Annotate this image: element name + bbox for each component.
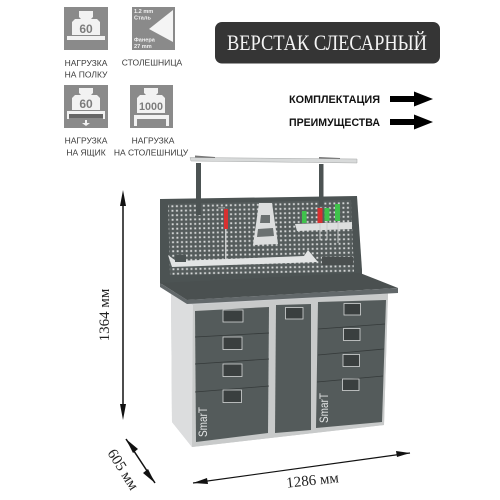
icon: tabletop layers: 1.2 mm	[134, 9, 153, 15]
label: shelf load: НАГРУЗКА	[65, 58, 108, 68]
lamp shelf	[190, 156, 357, 163]
label: shelf load: НА ПОЛКУ	[65, 70, 108, 80]
shelf posts	[196, 163, 324, 215]
label: drawer load: НА ЯЩИК	[66, 148, 106, 158]
label: depth: 605 мм	[104, 446, 141, 494]
label: tabletop load: НАГРУЗКА	[132, 136, 175, 146]
icon: tabletop layers: Сталь	[134, 16, 151, 22]
icon: shelf load 60	[64, 7, 108, 50]
icon: drawer load 60	[64, 85, 108, 128]
arrow: width	[193, 451, 410, 484]
link: equipment: КОМПЛЕКТАЦИЯ	[289, 94, 380, 106]
title: ВЕРСТАК СЛЕСАРНЫЙ	[227, 30, 427, 55]
left drawer stack: SmarT	[196, 406, 210, 437]
front frame	[192, 294, 388, 447]
title	[215, 22, 440, 64]
socket strip	[322, 257, 353, 265]
tool shelf right	[295, 204, 352, 243]
tabletop	[160, 273, 398, 304]
label: tabletop: СТОЛЕШНИЦА	[122, 58, 183, 68]
arrow: depth	[126, 439, 155, 483]
tool rack centre	[253, 203, 278, 245]
icon: tabletop load 1000: 1000	[139, 101, 163, 113]
workbench	[160, 156, 398, 447]
label: tabletop load: НА СТОЛЕШНИЦУ	[114, 148, 189, 158]
right drawer stack: SmarT	[317, 392, 331, 423]
link: equipment	[289, 92, 433, 106]
tool: red screwdriver	[218, 207, 228, 259]
right drawer stack	[316, 300, 386, 428]
icon: tabletop layers: 27 mm	[134, 44, 152, 50]
label: drawer load: НАГРУЗКА	[65, 136, 108, 146]
icon: tabletop layers	[132, 7, 175, 50]
side panel shading	[171, 292, 193, 447]
left drawer stack	[195, 307, 269, 442]
link: advantages: ПРЕИМУЩЕСТВА	[289, 117, 380, 129]
icon: shelf load 60: 60	[79, 22, 93, 36]
arrow: height	[120, 190, 126, 420]
icon: tabletop layers: Фанера	[134, 38, 156, 44]
icon: drawer load 60: 60	[79, 97, 93, 111]
label: height: 1364 мм	[97, 288, 113, 341]
label: width: 1286 мм	[286, 470, 340, 492]
long lower shelf	[168, 250, 318, 267]
centre door	[275, 304, 311, 433]
perforated back panel	[160, 196, 362, 284]
icon: tabletop load 1000	[130, 85, 173, 128]
workbench body	[171, 292, 388, 447]
link: advantages	[289, 114, 433, 130]
